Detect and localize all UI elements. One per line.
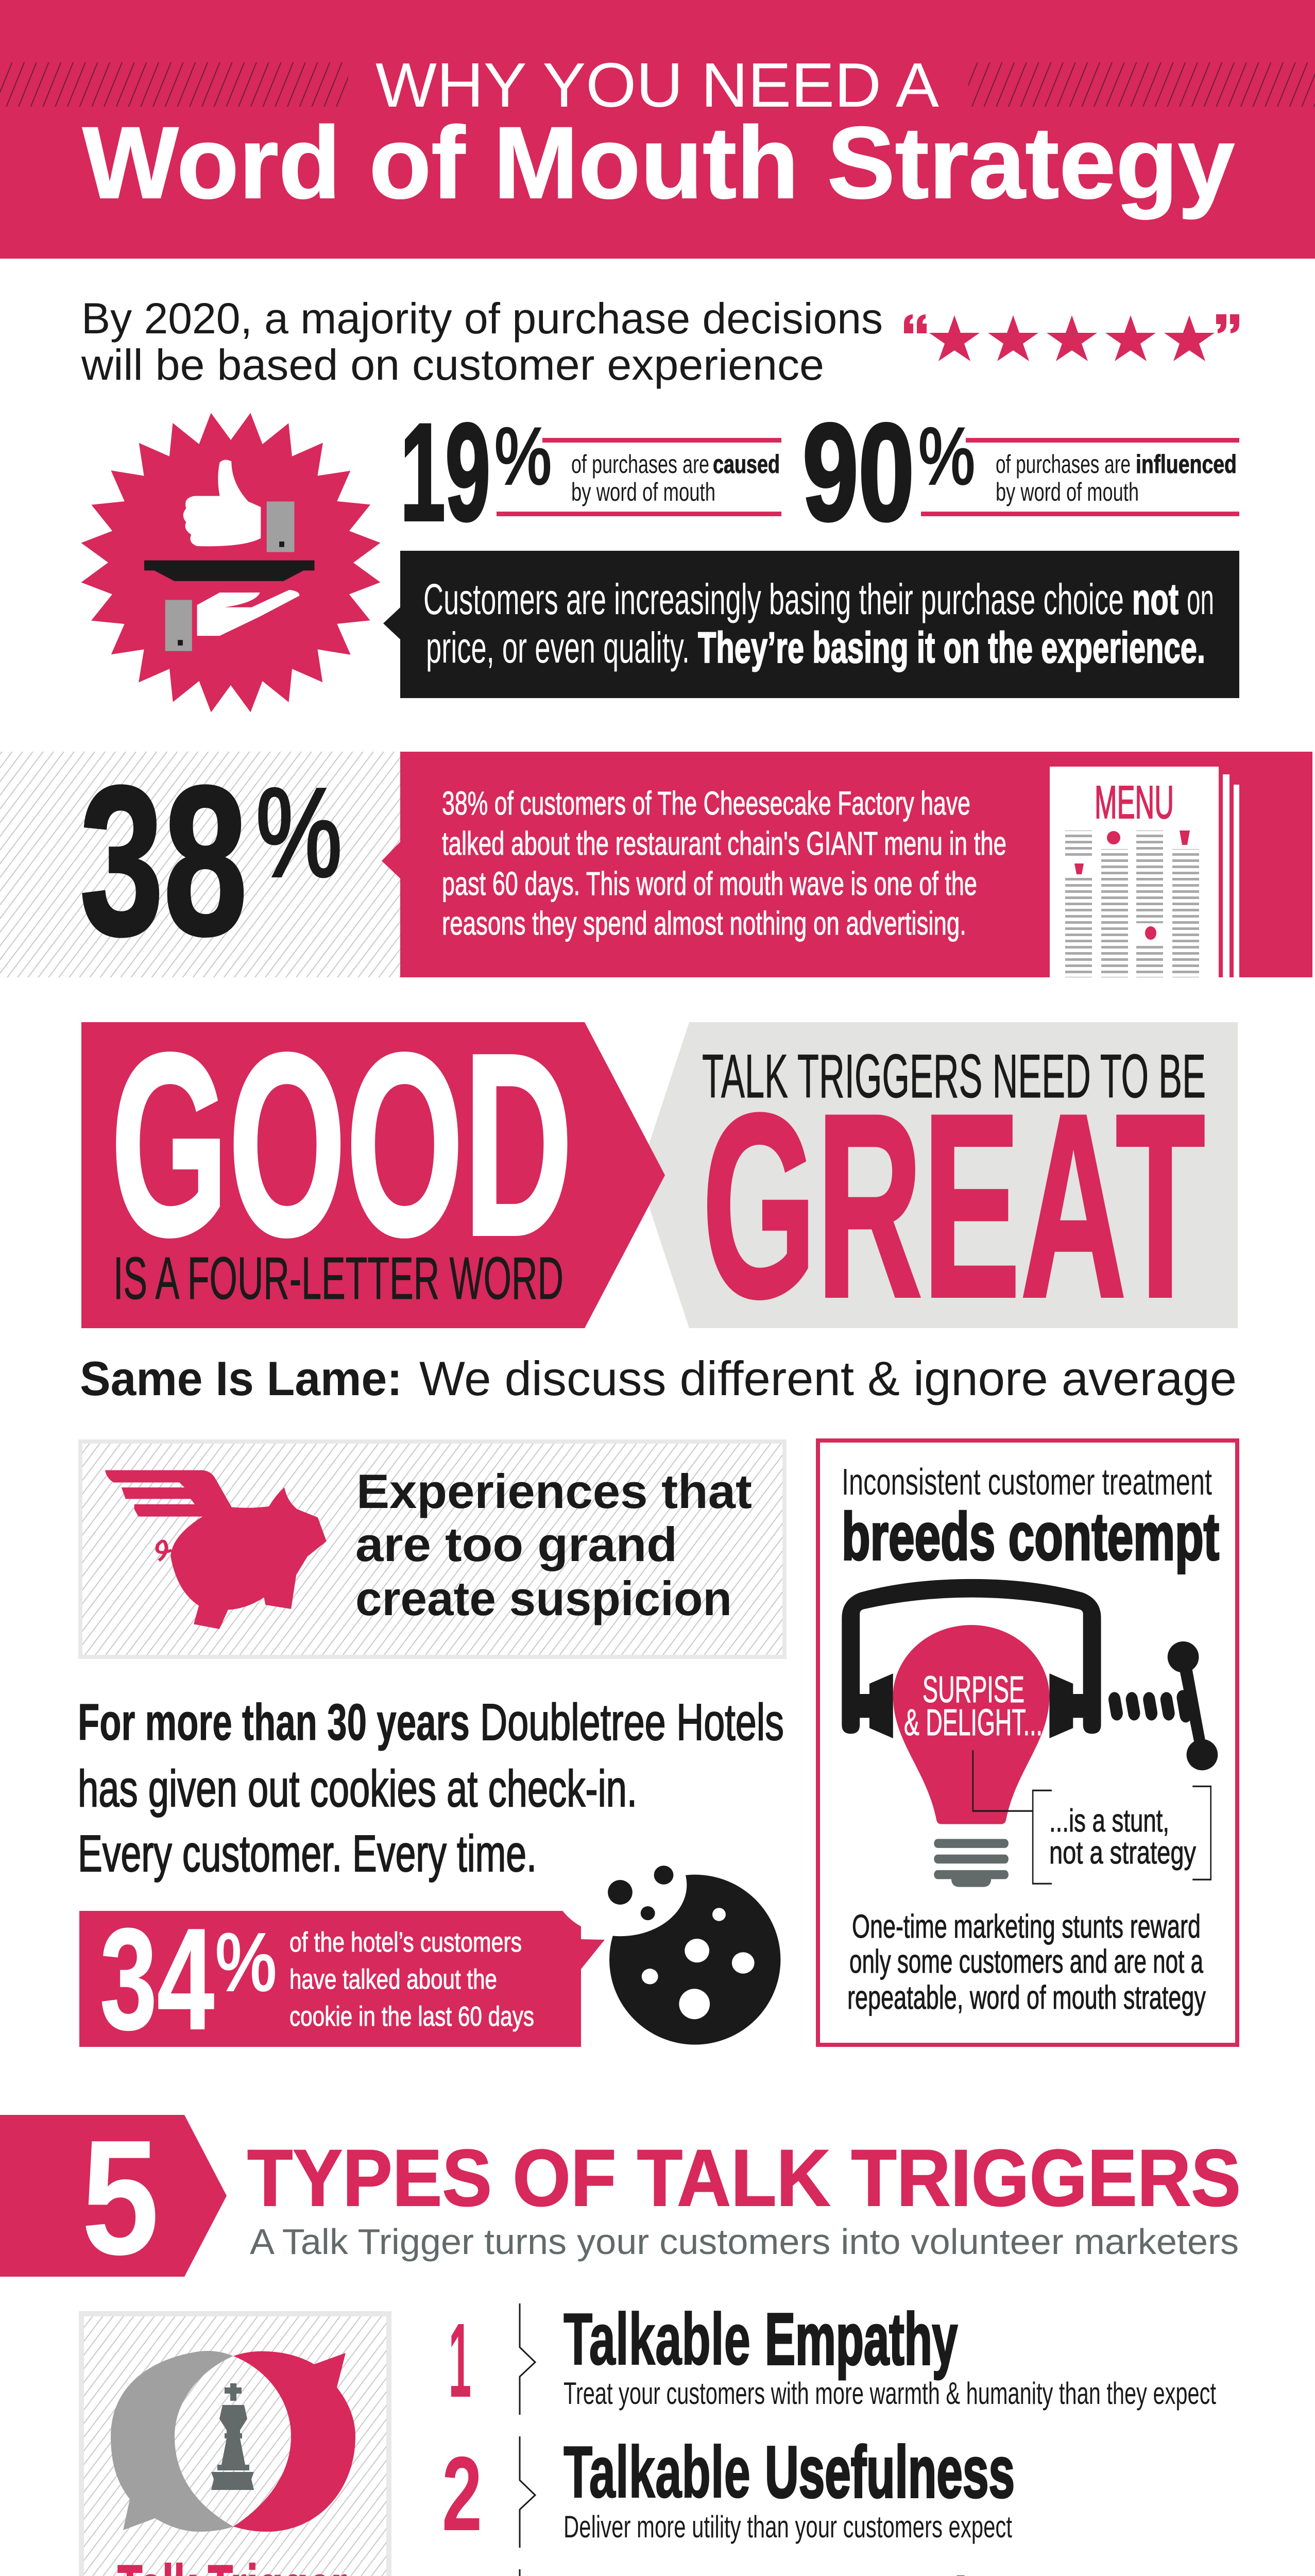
icon: chat bubbles with chess king bbox=[111, 2351, 355, 2532]
callout: experience statement bbox=[383, 551, 1239, 698]
callout: experience statement: price, or even quality. bbox=[426, 623, 690, 672]
stat: 90 percent: % bbox=[918, 412, 975, 501]
callout: 34 percent: % bbox=[215, 1917, 277, 2008]
text: surprise and delight: SURPISE bbox=[923, 1669, 1024, 1710]
text: is a stunt bbox=[1049, 1803, 1196, 1871]
text: surprise and delight bbox=[904, 1669, 1043, 1743]
callout: 34 percent: of the hotel’s customers bbox=[289, 1927, 522, 1958]
panel: inconsistent treatment breeds contempt bbox=[818, 1440, 1237, 2045]
list item 2: talkable usefulness: 2 bbox=[442, 2435, 482, 2553]
heading: 5 types of talk triggers: A Talk Trigger turns your customers into volunteer marketers bbox=[250, 2222, 1239, 2262]
list item 1: talkable empathy: 1 bbox=[449, 2301, 471, 2419]
stat: 19 percent: % bbox=[494, 412, 552, 501]
stat: 90 percent: influenced bbox=[1136, 450, 1237, 479]
list item 1: talkable empathy: Talkable bbox=[563, 2298, 750, 2380]
icon: cookie bbox=[554, 1834, 780, 2045]
text block: Doubletree cookies: Every customer. Every time. bbox=[78, 1825, 537, 1883]
text: experiences that are too grand create suspicion: Experiences that bbox=[356, 1464, 752, 1518]
text: experiences that are too grand create suspicion: create suspicion bbox=[355, 1571, 732, 1625]
callout: experience statement: on bbox=[1187, 575, 1214, 623]
icon: flying pig bbox=[105, 1470, 327, 1629]
panel: 38 percent Cheesecake Factory bbox=[0, 742, 1312, 979]
stat: 90 percent: of purchases are bbox=[996, 450, 1131, 479]
text block: Cheesecake Factory story: reasons they spend almost nothing on advertising. bbox=[442, 905, 966, 942]
list item 1: talkable empathy: Empathy bbox=[765, 2298, 958, 2380]
title line 1: WHY YOU NEED A bbox=[375, 50, 940, 120]
text: is a stunt: not a strategy bbox=[1049, 1835, 1196, 1871]
intro text: By 2020, a majority of purchase decisions bbox=[81, 294, 883, 343]
callout: experience statement: not bbox=[1132, 575, 1179, 623]
panel: GOOD is a four-letter word: GOOD bbox=[111, 999, 573, 1290]
stat: 19 percent: caused bbox=[713, 450, 780, 479]
panel: GOOD is a four-letter word bbox=[81, 999, 1238, 1328]
list item 2: talkable usefulness: Usefulness bbox=[765, 2431, 1015, 2513]
text block: Doubletree cookies: has given out cookies at check-in. bbox=[78, 1760, 637, 1818]
text: surprise and delight: & DELIGHT... bbox=[904, 1702, 1043, 1743]
text block: Doubletree cookies: Doubletree Hotels bbox=[480, 1693, 784, 1751]
callout: 34 percent: cookie in the last 60 days bbox=[289, 2001, 534, 2032]
header banner bbox=[0, 0, 1315, 259]
text: experiences that are too grand create suspicion: are too grand bbox=[355, 1517, 677, 1571]
five star rating icon bbox=[904, 314, 1239, 361]
title line 2: Word of Mouth Strategy bbox=[82, 106, 1235, 219]
callout: 34 percent: 34 bbox=[100, 1899, 215, 2060]
list item 2: talkable usefulness bbox=[442, 2431, 1015, 2553]
callout: 34 percent bbox=[79, 1899, 605, 2060]
panel: experiences too grand bbox=[80, 1442, 784, 1657]
icon: menu: MENU bbox=[1095, 777, 1174, 828]
text block: Cheesecake Factory story: past 60 days. This word of mouth wave is one of the bbox=[442, 865, 977, 902]
stat: 90 percent bbox=[802, 395, 1239, 549]
text: is a stunt: ...is a stunt, bbox=[1049, 1803, 1169, 1839]
panel: GOOD is a four-letter word: IS A FOUR-LETTER WORD bbox=[113, 1245, 563, 1312]
stat: 19 percent bbox=[400, 395, 781, 549]
stat: 19 percent: by word of mouth bbox=[571, 478, 715, 506]
stat: 38 percent: 38 bbox=[80, 742, 247, 979]
text: experiences that are too grand create suspicion bbox=[355, 1464, 752, 1625]
heading: same is lame: Same Is Lame: bbox=[80, 1351, 402, 1405]
heading: 5 types of talk triggers: 5 bbox=[81, 2106, 159, 2289]
heading: 5 types of talk triggers bbox=[0, 2106, 1241, 2289]
heading: 5 types of talk triggers: TYPES OF TALK TRIGGERS bbox=[247, 2133, 1241, 2223]
intro text bbox=[81, 294, 883, 389]
text block: Cheesecake Factory story: talked about the restaurant chain's GIANT menu in the bbox=[442, 825, 1006, 862]
intro text: will be based on customer experience bbox=[81, 341, 824, 389]
text: one-time marketing stunts bbox=[847, 1908, 1206, 2016]
icon: service badge with thumbs up on tray bbox=[61, 393, 400, 732]
list item 2: talkable usefulness: Talkable bbox=[563, 2431, 750, 2513]
stat: 38 percent: % bbox=[256, 762, 342, 903]
text block: Cheesecake Factory story bbox=[442, 785, 1006, 942]
icon: light bulb in vise bbox=[842, 1579, 1218, 1887]
stat: 90 percent: by word of mouth bbox=[996, 478, 1139, 506]
heading: same is lame: We discuss different & ignore average bbox=[419, 1351, 1237, 1405]
list item 1: talkable empathy bbox=[449, 2298, 1216, 2419]
text block: Doubletree cookies bbox=[78, 1693, 784, 1883]
list item 3: talkable generosity bbox=[442, 2564, 1009, 2576]
icon: menu bbox=[1050, 767, 1239, 977]
heading: breeds contempt bbox=[842, 1462, 1219, 1574]
panel: talk trigger definition ribbon bbox=[81, 2314, 389, 2576]
text block: Cheesecake Factory story: 38% of customers of The Cheesecake Factory have bbox=[442, 785, 970, 822]
stat: 90 percent: 90 bbox=[802, 395, 914, 549]
list item 2: talkable usefulness: Deliver more utility than your customers expect bbox=[563, 2510, 1012, 2544]
callout: 34 percent: have talked about the bbox=[289, 1964, 497, 1995]
text block: Doubletree cookies: For more than 30 years bbox=[78, 1693, 470, 1751]
stat: 19 percent: of purchases are bbox=[571, 450, 709, 479]
stat: 19 percent: 19 bbox=[400, 395, 490, 549]
